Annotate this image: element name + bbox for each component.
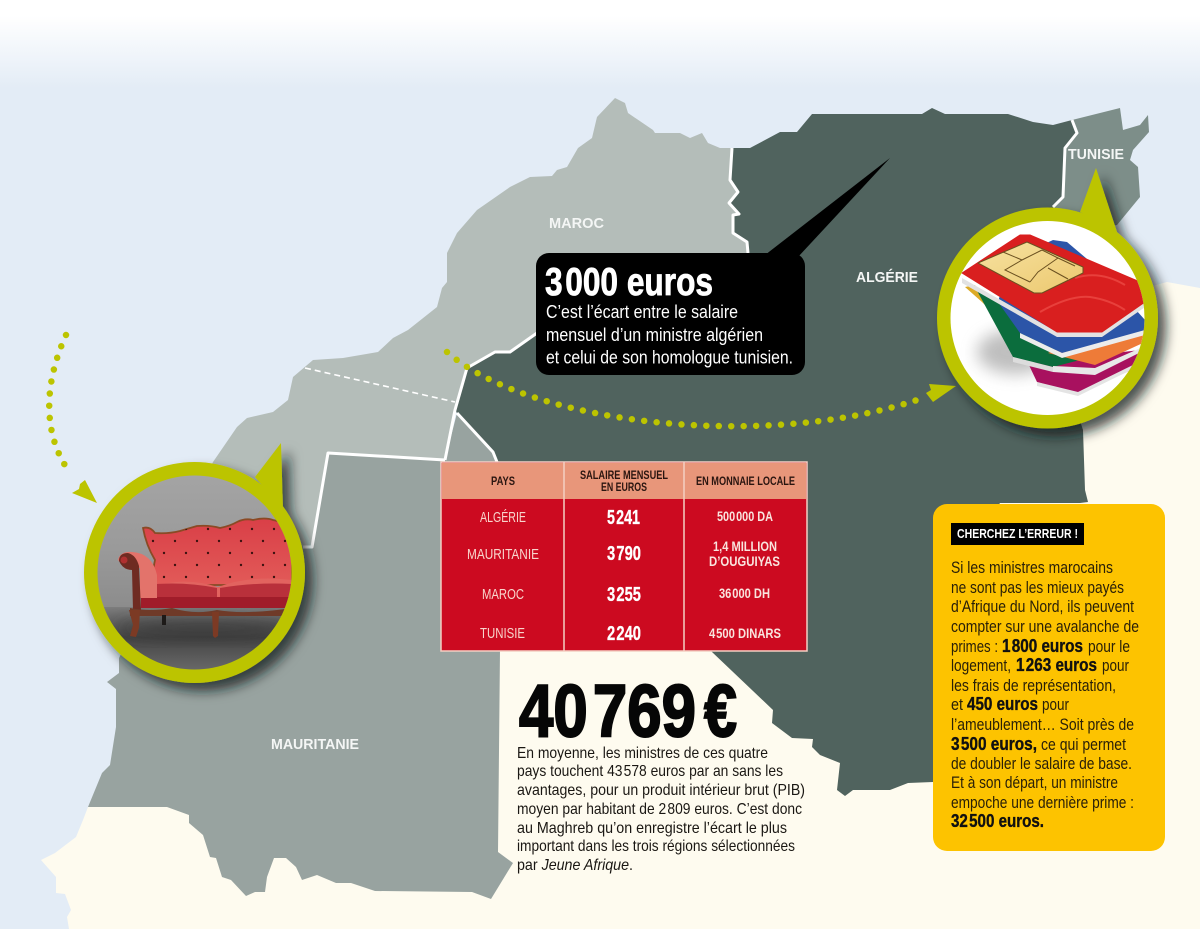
map: white borders	[303, 120, 1077, 547]
callout: 3000 euros	[536, 158, 890, 375]
icon: sofa in green circle	[84, 443, 305, 687]
top white fade	[0, 0, 1200, 88]
panel: cherchez l'erreur: l’ameublement… Soit près de	[951, 715, 1134, 734]
panel: cherchez l'erreur: compter sur une avalanche de	[951, 617, 1139, 636]
salary table: 5 241	[607, 507, 640, 529]
salary table: MAROC	[482, 586, 524, 603]
panel: cherchez l'erreur: pour	[1042, 695, 1069, 714]
country label: Algérie: ALGÉRIE	[856, 269, 918, 286]
map: Mauritanie	[88, 413, 513, 899]
salary table: 36 000 DH	[719, 585, 770, 601]
text block: average explanation: par Jeune Afrique.	[517, 857, 633, 874]
panel: cherchez l'erreur: 1 263 euros	[1016, 655, 1097, 675]
land: neighbouring countries	[41, 282, 1200, 929]
panel: cherchez l'erreur	[933, 504, 1165, 851]
text block: average explanation: En moyenne, les ministres de ces quatre	[517, 745, 768, 762]
salary table: ALGÉRIE	[480, 509, 526, 526]
text block: average explanation: moyen par habitant de 2 809 euros. C’est donc	[517, 801, 802, 818]
text block: average explanation: important dans les trois régions sélectionnées	[517, 838, 795, 855]
panel: cherchez l'erreur: ce qui permet	[1041, 735, 1126, 754]
panel: cherchez l'erreur: Et à son départ, un ministre	[951, 773, 1118, 792]
big figure: 40 769 euros: 40 769	[519, 670, 696, 752]
panel: cherchez l'erreur: pour le	[1088, 637, 1130, 656]
callout: 3000 euros: C’est l’écart entre le salaire	[546, 302, 738, 322]
salary table: 3 255	[607, 584, 641, 606]
salary table	[441, 462, 807, 651]
panel: cherchez l'erreur: de doubler le salaire de base.	[951, 754, 1132, 773]
salary table: 3 790	[607, 543, 641, 565]
country label: Tunisie: TUNISIE	[1068, 146, 1124, 163]
map: Maroc and Sahara	[120, 98, 748, 650]
panel: cherchez l'erreur: pour	[1102, 656, 1129, 675]
panel: cherchez l'erreur: Si les ministres marocains	[951, 558, 1113, 577]
panel: cherchez l'erreur: les frais de représentation,	[951, 676, 1116, 695]
icon: SIM cards in green circle	[937, 168, 1158, 428]
salary table: 4 500 DINARS	[709, 625, 781, 641]
callout: 3000 euros: mensuel d’un ministre algérien	[546, 325, 763, 345]
panel: cherchez l'erreur: primes :	[951, 637, 998, 656]
salary table: 1,4 MILLION	[713, 538, 777, 554]
salary table: 500 000 DA	[717, 508, 773, 524]
map: Algérie	[455, 108, 1088, 796]
panel: cherchez l'erreur: 450 euros	[967, 694, 1038, 714]
salary table: EN MONNAIE LOCALE	[696, 474, 795, 488]
callout: 3000 euros: et celui de son homologue tunisien.	[546, 348, 793, 368]
text block: average explanation: au Maghreb qu’on enregistre l’écart le plus	[517, 820, 787, 837]
salary table: EN EUROS	[601, 480, 647, 494]
salary table: 2 240	[607, 623, 641, 645]
panel: cherchez l'erreur: ne sont pas les mieux payés	[951, 578, 1124, 597]
panel: cherchez l'erreur: 3 500 euros,	[951, 734, 1037, 754]
panel: cherchez l'erreur: CHERCHEZ L’ERREUR !	[957, 527, 1078, 541]
dotted arrow: Algérie to SIM cards	[447, 352, 956, 426]
callout: 3000 euros: 3 000 euros	[545, 261, 713, 304]
big figure: 40 769 euros: €	[704, 670, 737, 752]
panel: cherchez l'erreur: 32 500 euros.	[951, 811, 1044, 831]
text block: average explanation: pays touchent 43 578 euros par an sans les	[517, 763, 783, 780]
salary table: PAYS	[491, 474, 515, 488]
text block: average explanation: avantages, pour un produit intérieur brut (PIB)	[517, 782, 805, 799]
map: Tunisie	[1053, 108, 1149, 230]
country label: Mauritanie: MAURITANIE	[271, 736, 359, 753]
salary table: TUNISIE	[480, 625, 525, 642]
panel: cherchez l'erreur: et	[951, 695, 963, 714]
panel: cherchez l'erreur: logement,	[951, 656, 1011, 675]
panel: cherchez l'erreur: d’Afrique du Nord, ils peuvent	[951, 597, 1134, 616]
salary table: MAURITANIE	[467, 546, 539, 563]
country label: Maroc: MAROC	[549, 215, 604, 232]
panel: cherchez l'erreur: 1 800 euros	[1002, 636, 1083, 656]
salary table: SALAIRE MENSUEL	[580, 468, 668, 482]
salary table: D’OUGUIYAS	[709, 553, 780, 569]
panel: cherchez l'erreur: empoche une dernière prime :	[951, 793, 1134, 812]
dotted arrow: towards sofa	[49, 335, 97, 503]
text block: average explanation	[517, 745, 805, 874]
